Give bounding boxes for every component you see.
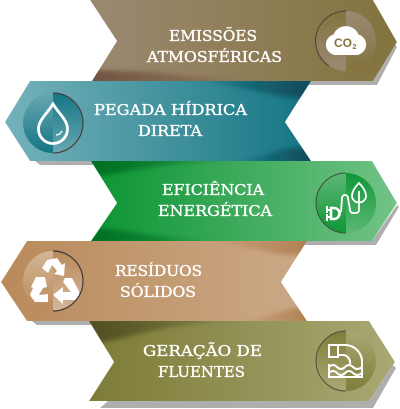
label text: EFICIÊNCIA bbox=[162, 181, 264, 199]
label text: ENERGÉTICA bbox=[158, 202, 272, 220]
label text: GERAÇÃO DE bbox=[143, 342, 262, 360]
icon: CO2 cloud: CO bbox=[334, 36, 352, 50]
ribbon body bbox=[85, 318, 395, 401]
label text: ATMOSFÉRICAS bbox=[146, 48, 282, 66]
ribbon shadow bbox=[35, 161, 95, 165]
icon: plug and leaf bbox=[316, 173, 376, 233]
icon: recycling arrows bbox=[23, 251, 83, 311]
ribbon: Emissões Atmosféricas bbox=[90, 0, 397, 86]
label text bbox=[143, 342, 262, 381]
icon: effluent pipe bbox=[316, 331, 376, 391]
label text: SÓLIDOS bbox=[120, 283, 196, 301]
ribbon shadow bbox=[305, 44, 397, 85]
ribbon body bbox=[1, 238, 312, 324]
ribbon: Geração de Efluentes bbox=[85, 318, 396, 408]
ribbon shadow bbox=[32, 321, 95, 325]
ribbon shadow bbox=[100, 365, 396, 408]
label text: FLUENTES bbox=[158, 363, 245, 381]
ribbon: Pegada Hídrica Direta bbox=[5, 78, 318, 165]
label text bbox=[115, 262, 202, 301]
label text bbox=[158, 181, 272, 220]
label text: DIRETA bbox=[138, 122, 202, 140]
ribbon body bbox=[90, 0, 397, 86]
ribbon shadow bbox=[300, 205, 399, 245]
label text bbox=[94, 101, 247, 140]
ribbon: Eficiência Energética bbox=[85, 158, 399, 245]
label text bbox=[146, 27, 282, 66]
ribbon: Resíduos Sólidos bbox=[1, 238, 312, 325]
icon: CO2 cloud: 2 bbox=[352, 44, 356, 51]
label text: RESÍDUOS bbox=[115, 262, 202, 280]
ribbon body bbox=[85, 158, 397, 244]
label text: EMISSÕES bbox=[169, 27, 257, 45]
icon: water drop bbox=[23, 93, 83, 153]
icon: CO2 cloud bbox=[316, 11, 376, 71]
label text: PEGADA HÍDRICA bbox=[94, 101, 247, 119]
ribbon body bbox=[5, 78, 318, 164]
